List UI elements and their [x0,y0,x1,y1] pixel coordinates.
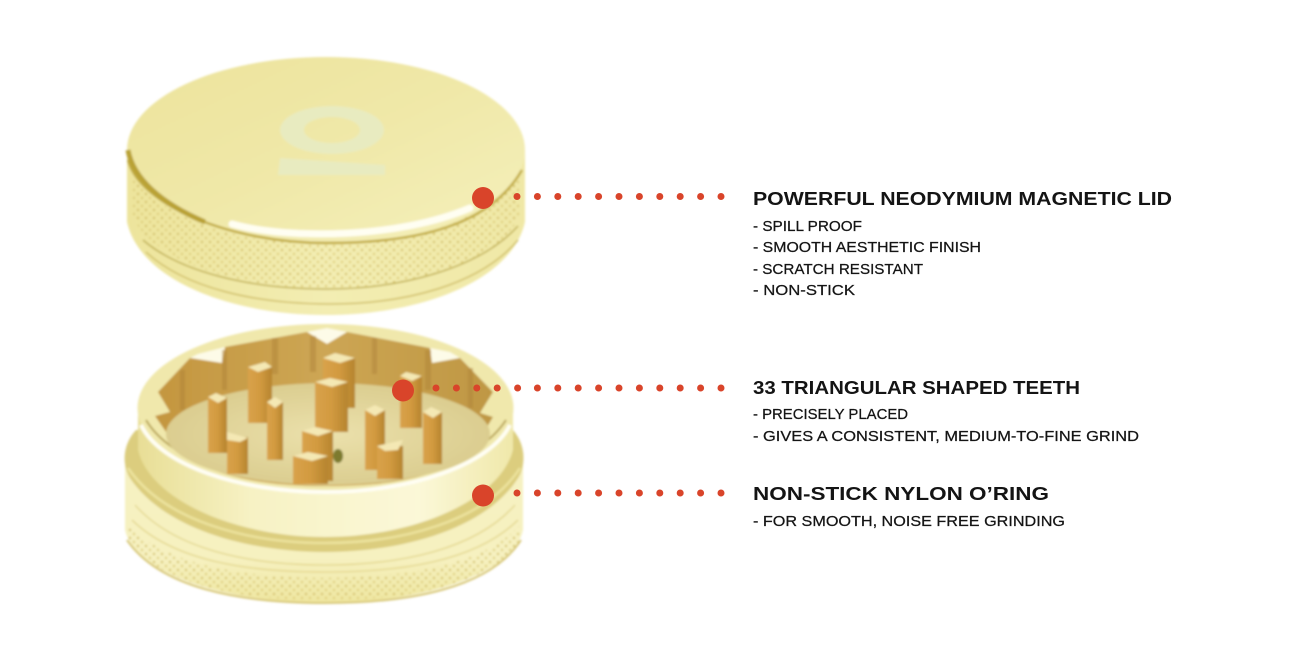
tooth 9 [227,432,248,474]
tooth 8 [423,407,442,464]
base grooves [132,505,518,572]
tooth 10 [302,427,333,481]
logo on lid [278,106,385,175]
grinder teeth [208,353,442,484]
tooth 7 [365,405,385,470]
text block: o-ring [753,484,1065,530]
list: lid features [753,218,981,299]
callout connector: teeth [392,380,724,402]
heading: magnetic lid: POWERFUL NEODYMIUM MAGNETIC LID [753,189,1172,209]
inner rim [138,324,514,492]
tooth 1 [323,353,355,408]
callout connector: magnetic lid [472,187,724,209]
tooth 4 [315,378,348,432]
base flange ring [125,430,523,552]
lid shadow edge [128,160,522,243]
lid highlight [232,208,470,234]
list: lid features: - SPILL PROOF [753,218,862,235]
tooth 5 [208,393,227,453]
list: teeth features: - PRECISELY PLACED [753,406,908,423]
lid knurled band [131,165,521,288]
lid grooves [143,226,518,304]
base body [125,455,523,603]
rim highlights [190,328,460,363]
floor hole [333,449,343,463]
tooth 6 [267,397,283,460]
chamber wall vertical shading [180,336,473,410]
heading: teeth: 33 TRIANGULAR SHAPED TEETH [753,378,1080,398]
list: lid features: - NON-STICK [753,282,855,299]
list: teeth features: - GIVES A CONSISTENT, MEDIUM-TO-FINE GRIND [753,428,1139,445]
tooth 11 [377,440,403,479]
heading: o-ring: NON-STICK NYLON O’RING [753,484,1049,504]
grinder base [125,324,523,603]
list: lid features: - SCRATCH RESISTANT [753,261,923,278]
callout connector: o-ring [472,484,724,506]
base knurled band [127,525,521,600]
base neck [138,408,513,537]
text block: teeth [753,378,1139,445]
list: lid features: - SMOOTH AESTHETIC FINISH [753,239,981,256]
tooth 2 [248,362,272,423]
grinder lid [127,57,525,315]
tooth 3 [400,372,422,428]
base bottom edge [127,540,521,603]
chamber floor [166,383,490,485]
lid side wall [127,150,525,315]
list: teeth features [753,406,1139,445]
text block: magnetic lid [753,189,1172,299]
scalloped chamber wall [155,332,493,486]
list: o-ring features: - FOR SMOOTH, NOISE FREE GRINDING [753,513,1065,530]
lid top face [127,57,525,243]
tooth 12 [293,452,328,484]
